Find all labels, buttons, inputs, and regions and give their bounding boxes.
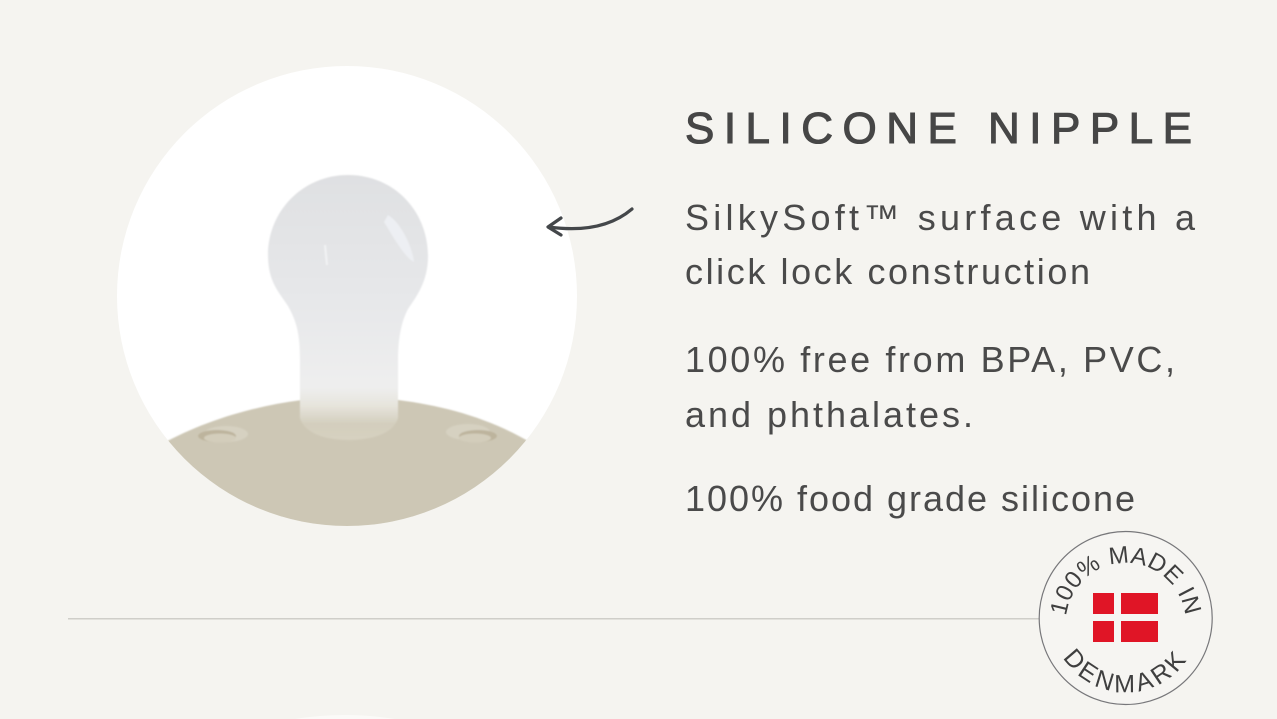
- product image: pacifier nipple in white circle: [117, 66, 577, 540]
- text block: SilkySoft surface: click lock construction: [685, 251, 1090, 292]
- text block: food grade: 100% food grade silicone: [685, 478, 1135, 519]
- text block: free from BPA: and phthalates.: [685, 394, 973, 435]
- text block: SilkySoft surface: [685, 197, 1196, 292]
- pacifier shield: [168, 400, 526, 526]
- shield holes: [198, 424, 497, 442]
- text block: SilkySoft surface: SilkySoft™ surface with a: [685, 197, 1196, 238]
- Danish flag: [1093, 593, 1158, 642]
- silicone nipple: [268, 175, 428, 440]
- badge top text: 100% MADE IN: [1051, 546, 1202, 614]
- text block: free from BPA: [685, 339, 1175, 435]
- nipple highlights: [384, 216, 413, 260]
- text block: free from BPA: 100% free from BPA, PVC,: [685, 339, 1175, 380]
- badge: 100% made in Denmark: [1038, 530, 1213, 706]
- arrow pointing to the nipple: [548, 209, 632, 235]
- divider line: [68, 618, 1043, 620]
- badge bottom text: DENMARK: [1064, 648, 1186, 692]
- heading: SILICONE NIPPLE: [685, 104, 1192, 153]
- next panel circle peeking in at bottom: [295, 715, 395, 719]
